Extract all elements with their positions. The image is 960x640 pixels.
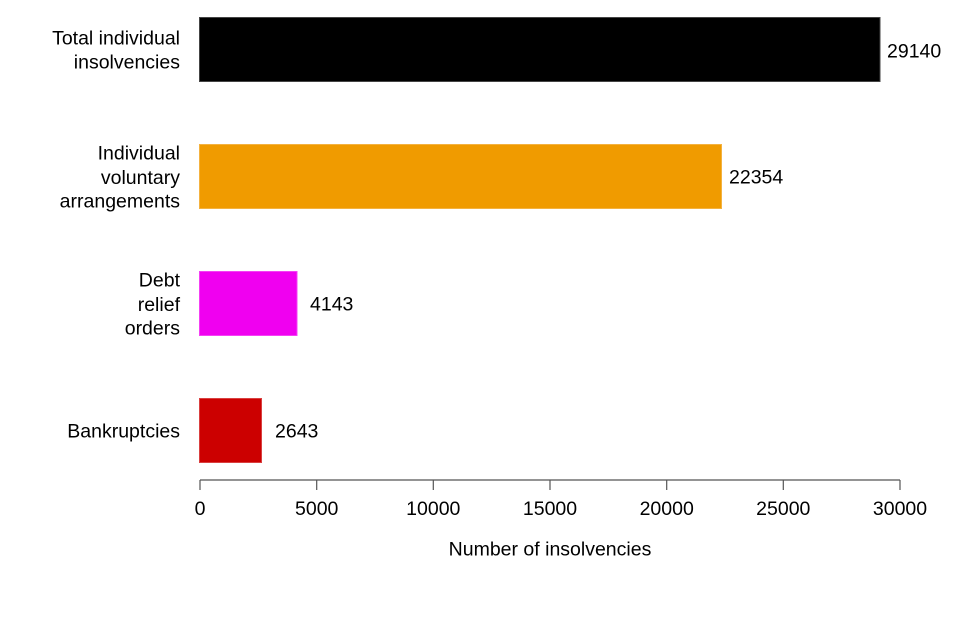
x axis [195, 480, 927, 560]
axis tick labels: 5000 [295, 498, 339, 520]
axis tick labels: 15000 [523, 498, 577, 520]
row: total individual insolvencies [52, 18, 941, 82]
row: individual voluntary arrangements [60, 142, 783, 212]
label: total individual insolvencies: insolvencies [74, 52, 180, 74]
label: debt relief orders: orders [125, 318, 180, 340]
label: individual voluntary arrangements: voluntary [101, 167, 180, 189]
bar: individual voluntary arrangements [200, 144, 722, 208]
value: 2643: 2643 [275, 420, 318, 442]
bar: bankruptcies [200, 398, 262, 462]
value: 22354: 22354 [729, 166, 783, 188]
axis tick labels: 10000 [406, 498, 461, 520]
axis title: Number of insolvencies [449, 538, 652, 560]
axis tick labels: 20000 [640, 498, 694, 520]
label: individual voluntary arrangements: arrangements [60, 190, 180, 212]
bar: debt relief orders [200, 272, 297, 336]
axis tick labels: 30000 [873, 498, 927, 520]
bar: total individual insolvencies [200, 18, 880, 82]
label: debt relief orders: Debt [139, 270, 180, 292]
label: individual voluntary arrangements: Individual [98, 142, 180, 164]
label: bankruptcies: Bankruptcies [67, 420, 180, 442]
value: 4143: 4143 [310, 294, 353, 316]
axis tick labels: 0 [195, 498, 206, 520]
axis tick labels [195, 498, 927, 520]
label: total individual insolvencies: Total individual [52, 28, 180, 50]
axis tick labels: 25000 [756, 498, 811, 520]
label: debt relief orders: relief [138, 294, 181, 316]
row: debt relief orders [125, 270, 353, 340]
value: 29140: 29140 [887, 40, 941, 62]
row: bankruptcies [67, 398, 318, 462]
